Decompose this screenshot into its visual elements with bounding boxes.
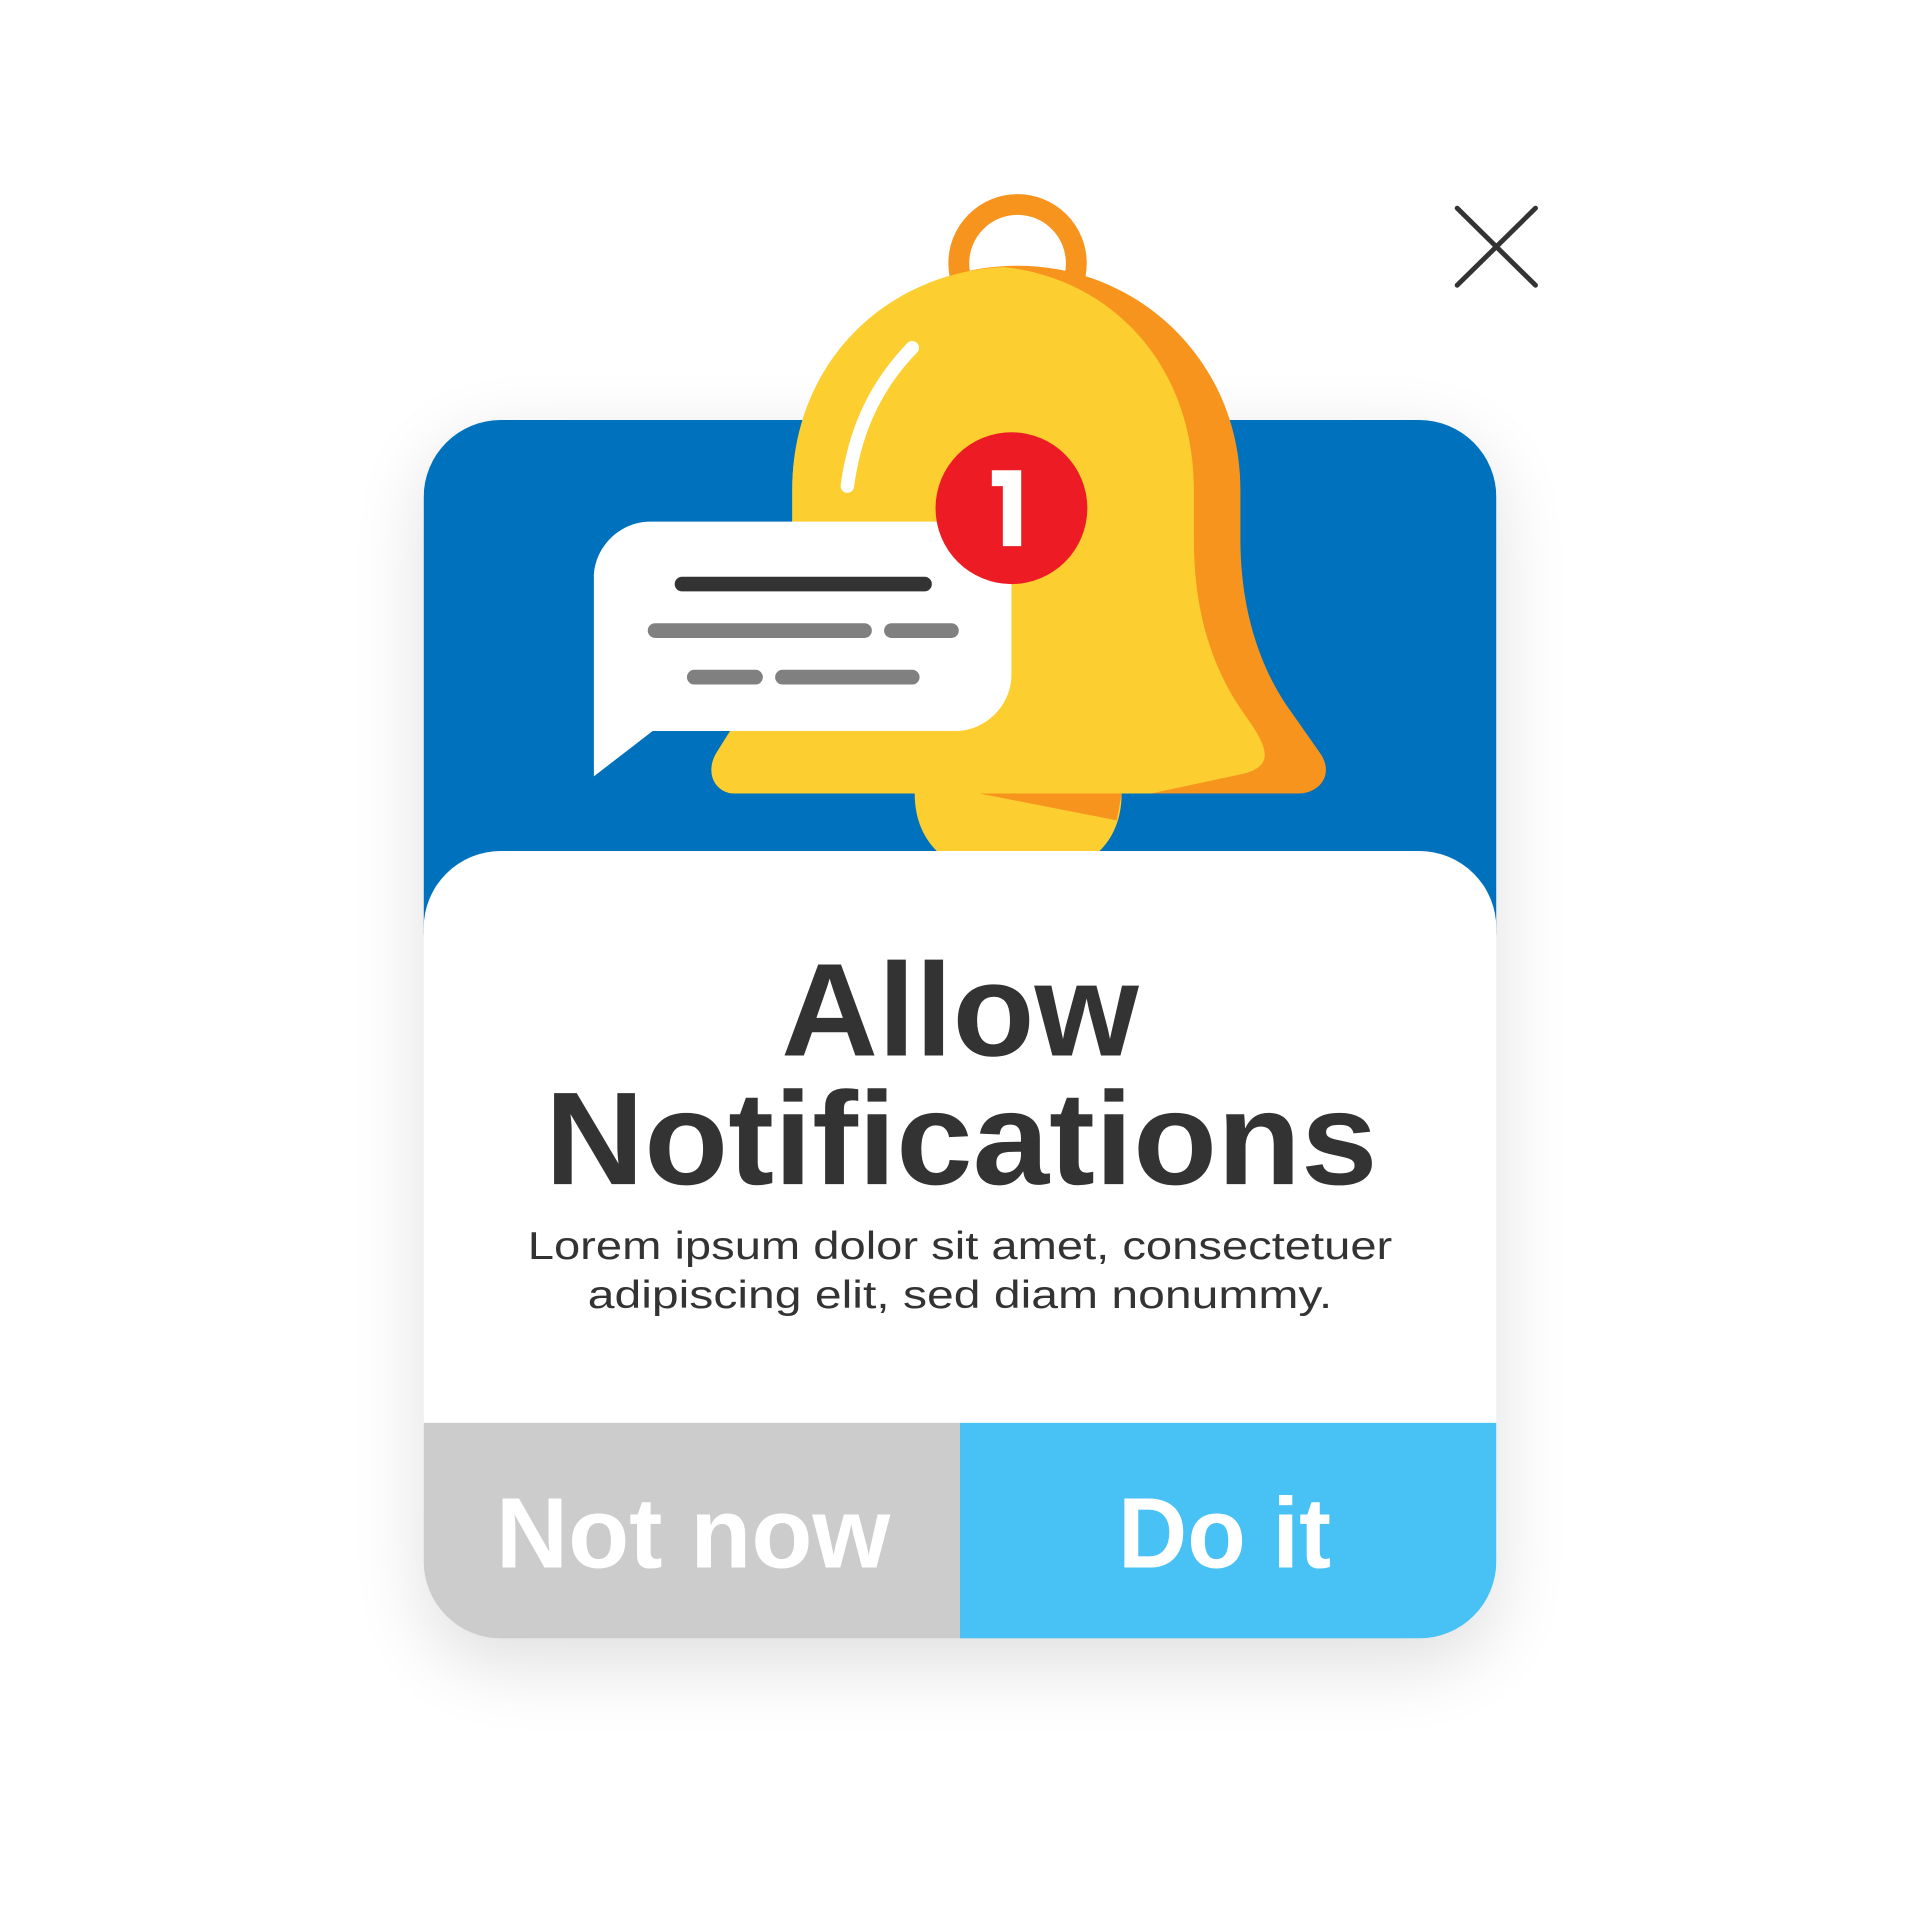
button: do it: Do it [1118,1477,1331,1589]
subtitle [528,1225,1392,1317]
subtitle: Lorem ipsum dolor sit amet, consectetuer [528,1225,1392,1268]
subtitle: adipiscing elit, sed diam nonummy. [588,1274,1332,1317]
button: do it [960,1423,1496,1638]
speech bubble [594,522,1011,776]
bell highlight [847,348,912,486]
bell loop [959,204,1076,322]
icon: close [1457,208,1536,285]
title: Notifications [545,1065,1378,1213]
button: not now [424,1423,960,1638]
card shadow [424,441,1496,1665]
badge: 1 [936,432,1087,584]
icon: bell [711,204,1326,851]
blue header [424,420,1496,934]
popup card [424,420,1496,1638]
title: Allow [781,937,1140,1085]
bell clapper [915,793,1122,851]
button: not now: Not now [496,1477,891,1589]
white content panel [424,851,1496,1423]
title [545,937,1378,1213]
